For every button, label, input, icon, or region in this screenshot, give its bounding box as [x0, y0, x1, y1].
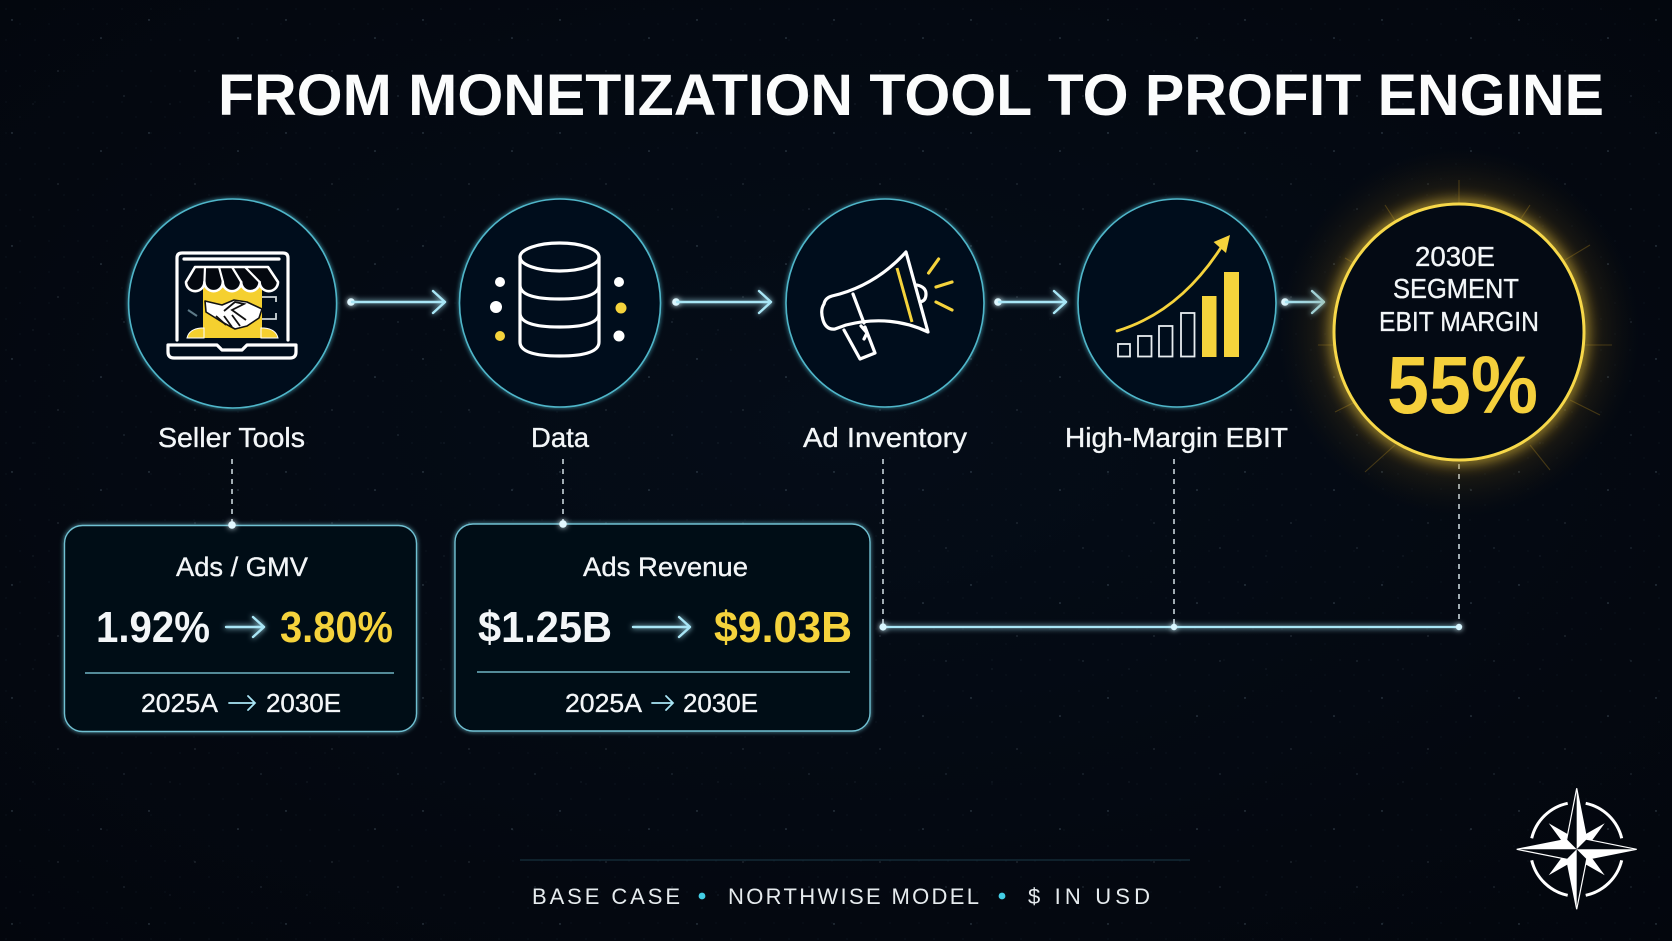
Ads Revenue heading: Ads Revenue: [583, 552, 748, 582]
step: Data: [460, 199, 771, 453]
Ads Revenue values: $1.25B: [478, 603, 612, 652]
highlight: 2030E segment EBIT margin: [1279, 148, 1639, 516]
arrow: data to ad inventory: [672, 291, 771, 313]
footer: [520, 860, 1190, 909]
step: Seller Tools: [129, 199, 445, 453]
footer: $ IN USD: [1028, 884, 1150, 909]
footer: NORTHWISE MODEL: [728, 884, 979, 909]
Ads Revenue period: 2030E: [683, 688, 758, 718]
margin label: SEGMENT: [1393, 273, 1519, 304]
title: FROM MONETIZATION TOOL TO PROFIT ENGINE: [218, 63, 1604, 128]
footer: BASE CASE: [532, 884, 680, 909]
Ads / GMV values: [96, 603, 393, 652]
Ads / GMV values: 1.92%: [96, 603, 210, 652]
Ads Revenue period: [565, 688, 758, 718]
label: High-Margin EBIT: High-Margin EBIT: [1065, 422, 1288, 453]
dashed connectors and metric line: [232, 459, 1462, 631]
icon: compass rose: [1517, 788, 1637, 909]
arrow: ad inventory to high-margin EBIT: [994, 291, 1066, 313]
margin label: [1379, 241, 1539, 337]
icon: megaphone: [786, 199, 984, 407]
Ads / GMV values: 3.80%: [280, 603, 393, 652]
Ads / GMV period: [141, 688, 341, 718]
step: High-Margin EBIT: [1065, 199, 1324, 453]
Ads Revenue values: $9.03B: [714, 603, 852, 652]
Ads Revenue values: [478, 603, 852, 652]
panel: Ads / GMV: [64, 521, 416, 732]
label: Data: Data: [531, 422, 589, 453]
margin label: EBIT MARGIN: [1379, 306, 1539, 337]
label: Ad Inventory: Ad Inventory: [803, 422, 967, 453]
Ads / GMV period: 2030E: [266, 688, 341, 718]
margin label: 2030E: [1415, 241, 1495, 272]
step: Ad Inventory: [786, 199, 1066, 453]
icon: database: [460, 199, 660, 407]
arrow: EBIT to margin: [1281, 291, 1324, 313]
Ads Revenue period: 2025A: [565, 688, 643, 718]
icon: rising bar chart: [1078, 199, 1276, 407]
panel: Ads Revenue: [455, 520, 870, 731]
label: Seller Tools: Seller Tools: [158, 422, 305, 453]
Ads / GMV period: 2025A: [141, 688, 219, 718]
arrow: seller tools to data: [347, 291, 445, 313]
margin value: 55%: [1387, 340, 1538, 431]
icon: laptop storefront: [129, 199, 337, 408]
Ads / GMV heading: Ads / GMV: [176, 552, 308, 582]
